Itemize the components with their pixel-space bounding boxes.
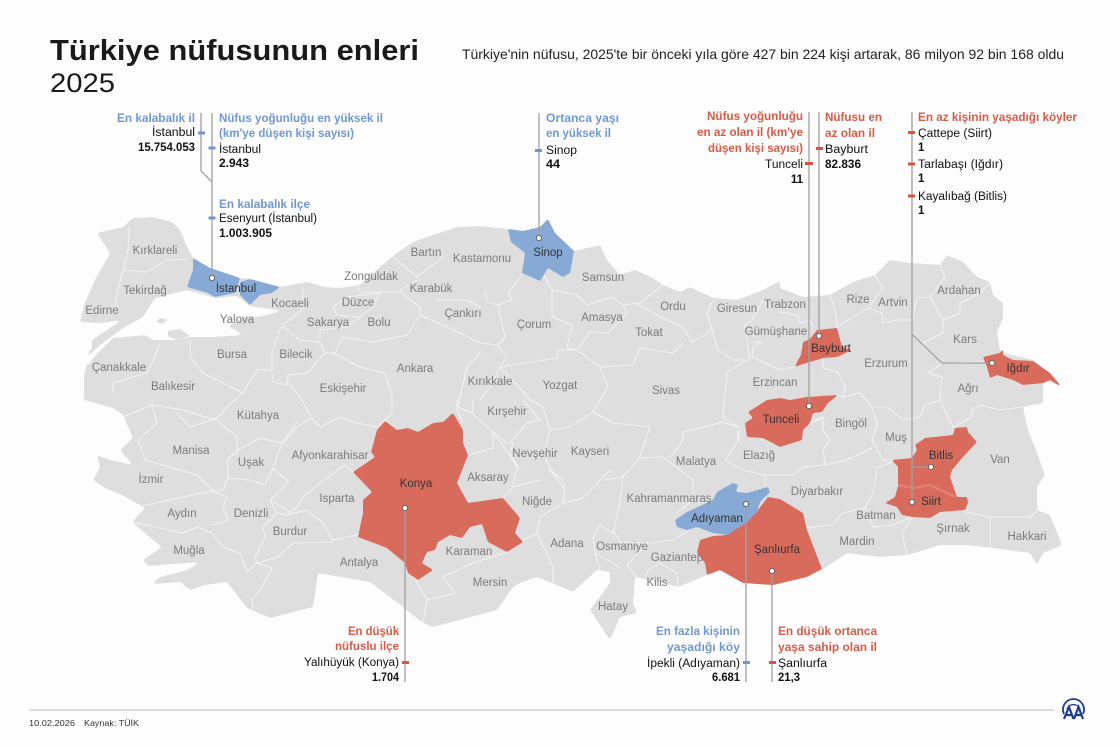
province name labels: Malatya <box>676 456 717 468</box>
province name labels: Edirne <box>85 305 119 317</box>
highlighted province: Tunceli <box>745 395 838 447</box>
province name labels: Tokat <box>635 327 664 339</box>
province name labels: Tekirdağ <box>123 285 167 297</box>
icon: AA logo <box>1063 699 1084 719</box>
callout: en az kişinin yaşadığı köyler: En az kişinin yaşadığı köyler <box>918 110 1077 124</box>
province name labels: Giresun <box>717 303 757 315</box>
highlighted province labels <box>216 247 1030 556</box>
callout: en düşük ortanca yaşa sahip olan il: En düşük ortanca <box>778 624 877 638</box>
callout: nüfus yoğunluğu en az olan il: 11 <box>791 174 804 186</box>
callout: en fazla kişinin yaşadığı köy: En fazla kişinin <box>656 624 740 638</box>
province name labels: Osmaniye <box>596 541 648 553</box>
province name labels: Antalya <box>340 557 379 569</box>
callout: en düşük nüfuslu ilçe: En düşük <box>348 624 399 638</box>
highlighted province labels: Bayburt <box>811 343 852 355</box>
callout: en düşük nüfuslu ilçe <box>304 505 409 684</box>
province name labels: Burdur <box>273 526 307 538</box>
callout: en kalabalık il: İstanbul <box>152 126 195 139</box>
callout: en kalabalık il <box>117 111 195 154</box>
province name labels: Kilis <box>646 577 668 589</box>
callout: en fazla kişinin yaşadığı köy <box>647 501 750 684</box>
callout: nüfusu en az olan il <box>816 110 882 339</box>
province name labels: Nevşehir <box>512 448 558 460</box>
callout: en düşük ortanca yaşa sahip olan il: 21,3 <box>778 672 800 684</box>
province name labels: Eskişehir <box>320 383 366 395</box>
callout: en az kişinin yaşadığı köyler: Tarlabaşı (Iğdır) <box>918 159 1003 171</box>
province name labels: Ankara <box>397 363 434 375</box>
province name labels: Niğde <box>522 496 552 508</box>
province name labels: Balıkesir <box>151 381 195 393</box>
callout: en düşük nüfuslu ilçe: Yalıhüyük (Konya) <box>304 657 399 669</box>
province name labels: Bartın <box>411 247 441 259</box>
title: 2025 <box>50 68 115 98</box>
province name labels: Kırklareli <box>133 245 177 257</box>
province name labels <box>85 245 1046 613</box>
callout: ortanca yaşı en yüksek il: 44 <box>546 159 561 171</box>
callout: en az kişinin yaşadığı köyler: 1 <box>918 142 925 154</box>
province name labels: Isparta <box>319 493 355 505</box>
callout: nüfus yoğunluğu en az olan il: Tunceli <box>765 159 803 171</box>
callout: ortanca yaşı en yüksek il <box>535 111 619 241</box>
province name labels: Batman <box>856 510 896 522</box>
province name labels: Muğla <box>173 545 205 557</box>
province name labels: Denizli <box>234 508 268 520</box>
highlighted provinces: Bitlis and Siirt <box>885 427 977 518</box>
highlighted province labels: Konya <box>400 478 433 490</box>
province name labels: Uşak <box>238 457 264 469</box>
callout: en kalabalık ilçe <box>219 197 317 240</box>
callout: nüfus yoğunluğu en az olan il: Nüfus yoğunluğu <box>707 109 803 123</box>
province name labels: Manisa <box>172 445 210 457</box>
callout: ortanca yaşı en yüksek il: Sinop <box>546 145 577 157</box>
province name labels: Aksaray <box>467 472 509 484</box>
highlighted province labels: Tunceli <box>763 414 799 426</box>
province name labels: Çanakkale <box>92 362 146 374</box>
province name labels: Karaman <box>446 546 492 558</box>
callout: İstanbul leader lines <box>198 113 216 281</box>
province name labels: Kütahya <box>237 410 280 422</box>
province name labels: Bingöl <box>835 418 867 430</box>
callout: en kalabalık ilçe: 1.003.905 <box>219 228 273 240</box>
callout: en az kişinin yaşadığı köyler <box>908 110 1077 505</box>
sea of Marmara and Saros <box>80 290 283 366</box>
province name labels: Zonguldak <box>344 271 398 283</box>
province name labels: Şırnak <box>936 523 970 535</box>
footer source: 10.02.2026 <box>29 718 75 728</box>
callout: en fazla kişinin yaşadığı köy: 6.681 <box>712 672 741 684</box>
highlighted province labels: Iğdır <box>1006 363 1030 375</box>
province name labels: Muş <box>885 432 907 444</box>
province name labels: Yalova <box>220 314 255 326</box>
province name labels: İzmir <box>139 473 164 486</box>
highlighted province: Şanlıurfa <box>697 497 822 585</box>
province name labels: Çorum <box>517 319 551 331</box>
province name labels: Gaziantep <box>651 552 703 564</box>
province name labels: Ardahan <box>937 285 981 297</box>
province name labels: Rize <box>846 294 870 306</box>
highlighted province: Konya <box>353 413 523 580</box>
footer source: Kaynak: TÜİK <box>84 718 139 728</box>
province name labels: Diyarbakır <box>791 486 843 498</box>
highlighted province labels: Şanlıurfa <box>754 544 801 556</box>
callout: en az kişinin yaşadığı köyler: Çattepe (Siirt) <box>918 128 992 140</box>
province name labels: Afyonkarahisar <box>292 450 369 462</box>
base landmass <box>80 217 1062 640</box>
province name labels: Adana <box>550 538 584 550</box>
callout: nüfus yoğunluğu en yüksek il: (km'ye düşen kişi sayısı) <box>219 126 354 140</box>
province name labels: Van <box>990 454 1010 466</box>
Siirt <box>885 485 968 518</box>
callout: en kalabalık il: 15.754.053 <box>138 142 195 154</box>
highlighted province labels: Adıyaman <box>691 513 743 525</box>
highlighted province labels: İstanbul <box>216 282 256 295</box>
callout: ortanca yaşı en yüksek il: en yüksek il <box>546 126 611 140</box>
callout: nüfusu en az olan il: Bayburt <box>825 144 869 156</box>
highlighted province: Bayburt <box>795 328 852 367</box>
highlighted province labels: Siirt <box>921 496 942 508</box>
province name labels: Hakkari <box>1008 531 1046 543</box>
highlighted province labels: Sinop <box>533 247 563 259</box>
callout: en fazla kişinin yaşadığı köy: İpekli (Adıyaman) <box>647 657 740 670</box>
province name labels: Mersin <box>473 577 507 589</box>
callout: en düşük ortanca yaşa sahip olan il: yaşa sahip olan il <box>778 640 877 654</box>
callout: nüfus yoğunluğu en yüksek il: 2.943 <box>219 158 249 170</box>
province name labels: Kırşehir <box>487 406 527 418</box>
province name labels: Çankırı <box>444 308 482 320</box>
province name labels: Sivas <box>652 385 680 397</box>
province name labels: Amasya <box>581 312 623 324</box>
callout: ortanca yaşı en yüksek il: Ortanca yaşı <box>546 111 619 125</box>
province name labels: Elazığ <box>743 450 775 462</box>
callout: nüfus yoğunluğu en az olan il: en az olan il (km'ye <box>697 125 803 139</box>
callout: nüfusu en az olan il: az olan il <box>825 126 875 140</box>
province name labels: Düzce <box>342 297 374 309</box>
province name labels: Aydın <box>167 508 197 520</box>
callout: en az kişinin yaşadığı köyler: 1 <box>918 173 925 185</box>
footer source <box>29 710 1054 728</box>
province name labels: Kayseri <box>571 446 609 458</box>
callout: en kalabalık il: En kalabalık il <box>117 111 195 125</box>
province name labels: Kırıkkale <box>468 376 512 388</box>
province name labels: Gümüşhane <box>745 326 807 338</box>
callout: nüfusu en az olan il: Nüfusu en <box>825 110 882 124</box>
callout: nüfus yoğunluğu en az olan il: düşen kişi sayısı) <box>708 141 803 155</box>
title <box>50 35 419 98</box>
callout: nüfus yoğunluğu en az olan il <box>697 109 813 409</box>
province name labels: Ordu <box>660 301 686 313</box>
province borders <box>113 227 1037 623</box>
callout: en fazla kişinin yaşadığı köy: yaşadığı köy <box>667 640 740 654</box>
province name labels: Mardin <box>839 536 875 548</box>
callout: en düşük nüfuslu ilçe: nüfuslu ilçe <box>335 639 399 653</box>
province name labels: Bilecik <box>279 349 313 361</box>
highlighted province: İstanbul <box>187 258 280 305</box>
highlighted province: Sinop <box>508 219 574 281</box>
highlighted province labels: Bitlis <box>929 450 953 462</box>
province name labels: Yozgat <box>543 380 578 392</box>
callout: nüfus yoğunluğu en yüksek il <box>219 111 383 170</box>
province name labels: Kocaeli <box>271 298 309 310</box>
title: Türkiye nüfusunun enleri <box>50 35 419 67</box>
map of Turkey <box>80 217 1062 640</box>
highlighted province: Iğdır <box>983 349 1062 387</box>
province name labels: Ağrı <box>957 383 979 395</box>
province name labels: Erzurum <box>864 358 908 370</box>
province name labels: Bursa <box>217 349 248 361</box>
callout: en az kişinin yaşadığı köyler: 1 <box>918 205 925 217</box>
province name labels: Trabzon <box>764 299 806 311</box>
province name labels: Hatay <box>598 601 628 613</box>
callout: nüfusu en az olan il: 82.836 <box>825 159 861 171</box>
callout: en kalabalık ilçe: Esenyurt (İstanbul) <box>219 212 317 225</box>
callout: en düşük ortanca yaşa sahip olan il: Şanlıurfa <box>778 658 828 670</box>
highlighted province: Adıyaman <box>675 483 770 535</box>
province name labels: Karabük <box>410 283 453 295</box>
Bitlis <box>892 427 977 497</box>
province name labels: Artvin <box>878 297 908 309</box>
callout: en düşük ortanca yaşa sahip olan il <box>769 568 877 684</box>
province name labels: Kastamonu <box>453 253 511 265</box>
province name labels: Kars <box>953 334 977 346</box>
province name labels: Sakarya <box>307 317 350 329</box>
province name labels: Bolu <box>367 317 391 329</box>
callout: nüfus yoğunluğu en yüksek il: İstanbul <box>219 143 261 156</box>
callout: en düşük nüfuslu ilçe: 1.704 <box>372 672 400 684</box>
callout: en kalabalık ilçe: En kalabalık ilçe <box>219 197 310 211</box>
callout: en az kişinin yaşadığı köyler: Kayalıbağ (Bitlis) <box>918 191 1007 203</box>
callout: nüfus yoğunluğu en yüksek il: Nüfus yoğunluğu en yüksek il <box>219 111 383 125</box>
province name labels: Erzincan <box>753 377 797 389</box>
province name labels: Kahramanmaraş <box>626 493 712 505</box>
subtitle: Türkiye'nin nüfusu, 2025'te bir önceki yıla göre 427 bin 224 kişi artarak, 86 milyon 92 bin 168 oldu <box>462 46 1064 62</box>
province name labels: Samsun <box>582 272 624 284</box>
